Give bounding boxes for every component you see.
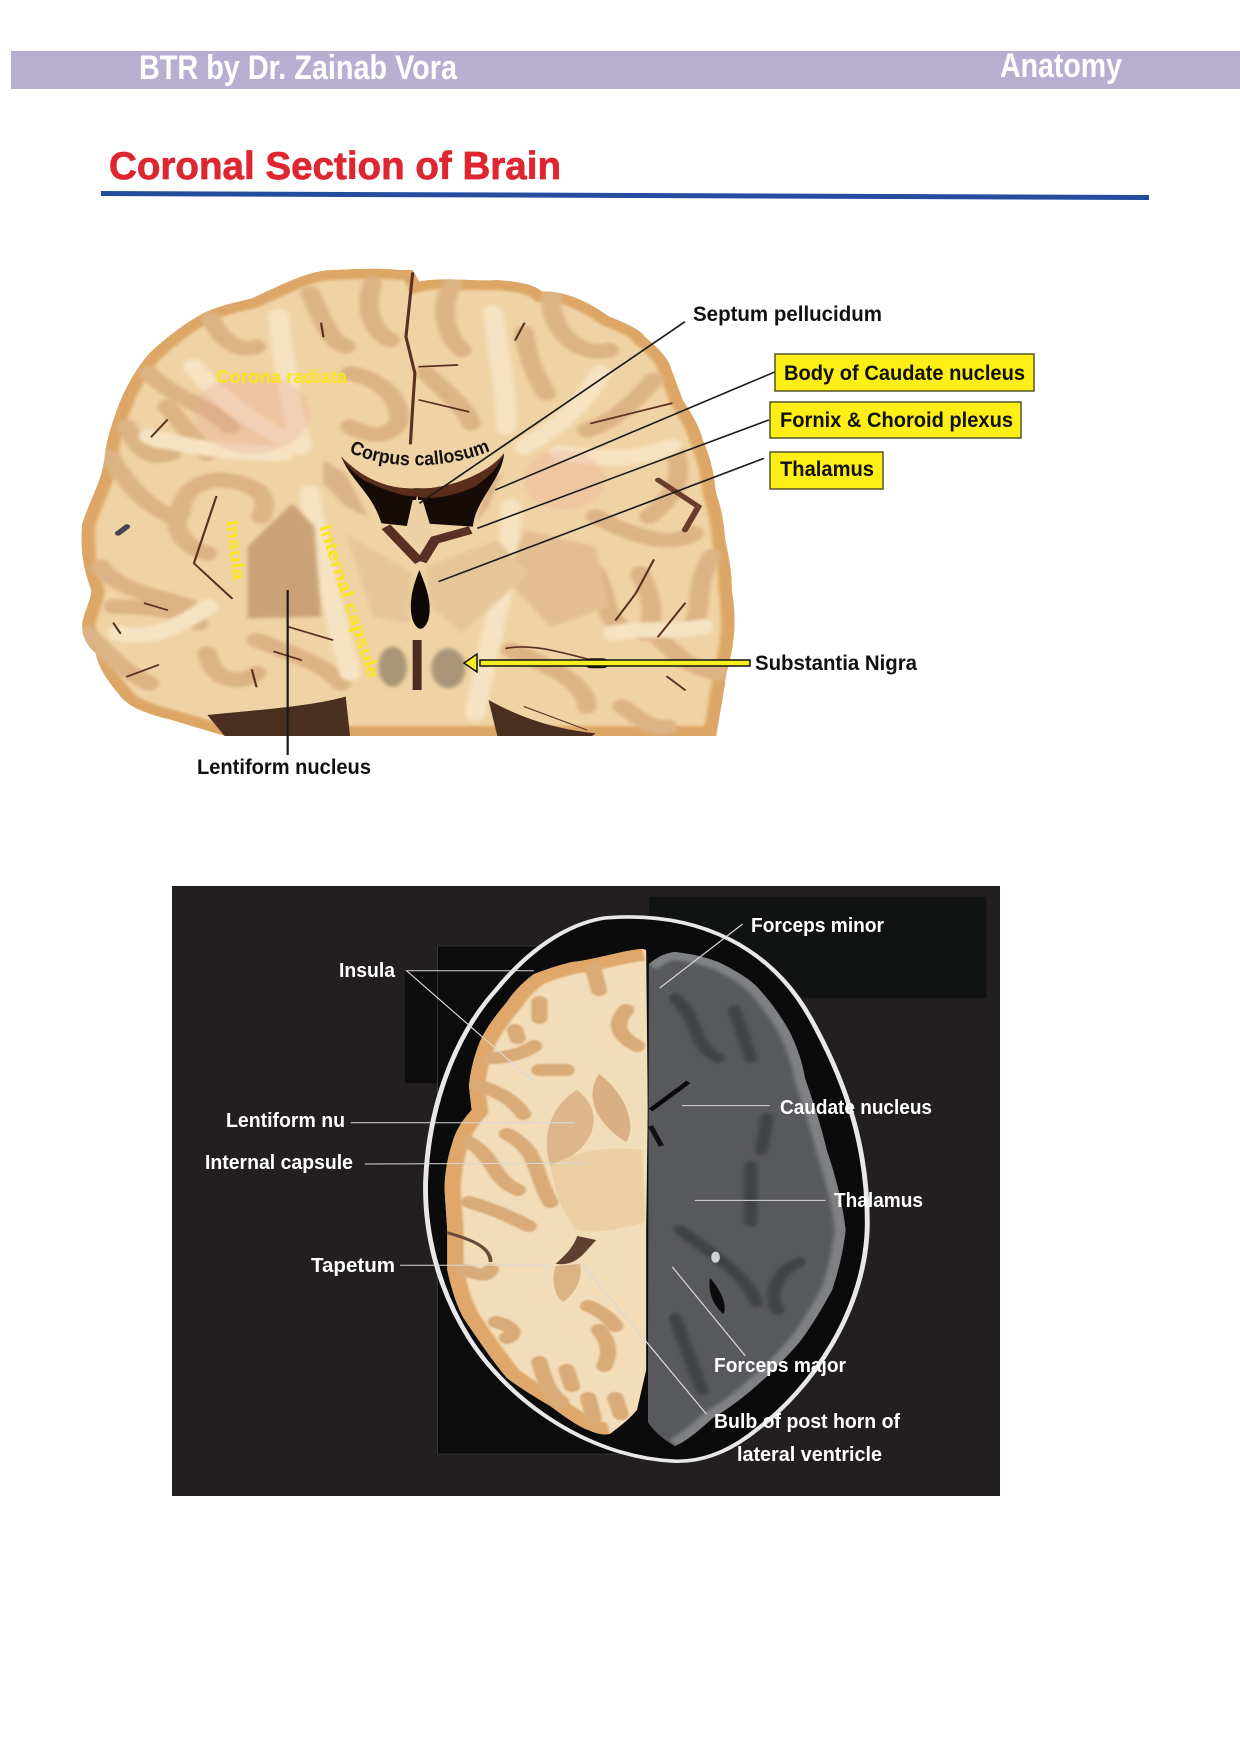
panel: axial brain section: [172, 886, 1000, 1496]
pointer lines: [351, 924, 826, 1414]
choroid plexus: [386, 527, 471, 562]
lentiform and thalamus: [547, 1090, 594, 1166]
aqueduct: [412, 640, 422, 690]
label: internal capsule: Internal capsule: [205, 1152, 353, 1174]
label: forceps major: Forceps major: [714, 1355, 846, 1377]
label: internal capsule: Internal capsule: [315, 522, 384, 680]
header band: [11, 47, 1240, 89]
white matter core: [118, 313, 703, 713]
third ventricle: [411, 570, 430, 629]
pointer line: fornix: [477, 420, 769, 528]
pointer line: body of caudate: [495, 372, 775, 490]
label: insula: Insula: [222, 519, 249, 582]
pointer line: septum pellucidum: [419, 322, 685, 503]
anatomical half: [431, 942, 649, 1442]
coronal brain photograph illustration: [60, 260, 775, 755]
septum: [406, 500, 430, 527]
label: corpus callosum: Corpus callosum: [351, 442, 490, 466]
page heading: Coronal Section of Brain: [109, 145, 561, 188]
callout: fornix and choroid plexus: Fornix & Choroid plexus: [780, 409, 1013, 432]
deep gray nuclei: [194, 373, 609, 688]
label: forceps minor: Forceps minor: [751, 915, 884, 937]
label: lateral ventricle: lateral ventricle: [737, 1444, 882, 1466]
label: thalamus: Thalamus: [834, 1190, 923, 1212]
callout: fornix and choroid plexus: [770, 402, 1021, 438]
heading underline: [101, 191, 1149, 200]
pointer line: thalamus: [439, 458, 764, 582]
callout: body of caudate nucleus: [775, 354, 1034, 391]
label: septum pellucidum: Septum pellucidum: [693, 303, 882, 326]
pointer line: lentiform: [285, 590, 290, 755]
brain outline: [60, 260, 760, 743]
lower dark cisterns: [207, 697, 350, 737]
label: bulb of posterior horn: Bulb of post horn of: [714, 1411, 900, 1433]
label: insula: Insula: [339, 960, 396, 982]
ventricle atrium: [556, 1236, 596, 1264]
label: tapetum: Tapetum: [311, 1255, 395, 1277]
lateral ventricles: [341, 453, 504, 527]
header subject: Anatomy: [1000, 47, 1122, 85]
callout: thalamus: Thalamus: [780, 458, 874, 481]
callout: body of caudate nucleus: Body of Caudate nucleus: [784, 362, 1025, 385]
label: caudate nucleus: Caudate nucleus: [780, 1097, 932, 1119]
label: lentiform nu: Lentiform nu: [226, 1110, 345, 1132]
axial labels: [205, 915, 932, 1466]
arrow: substantia nigra: [464, 654, 750, 672]
sulci: [114, 273, 698, 730]
MRI half: [648, 946, 854, 1450]
label: lentiform nucleus: Lentiform nucleus: [197, 756, 371, 779]
skull ring: [426, 917, 867, 1461]
header title: BTR by Dr. Zainab Vora: [139, 49, 458, 87]
label: corona radiata: Corona radiata: [216, 367, 348, 387]
callout: thalamus: [770, 452, 883, 489]
label: substantia nigra: Substantia Nigra: [755, 652, 917, 675]
